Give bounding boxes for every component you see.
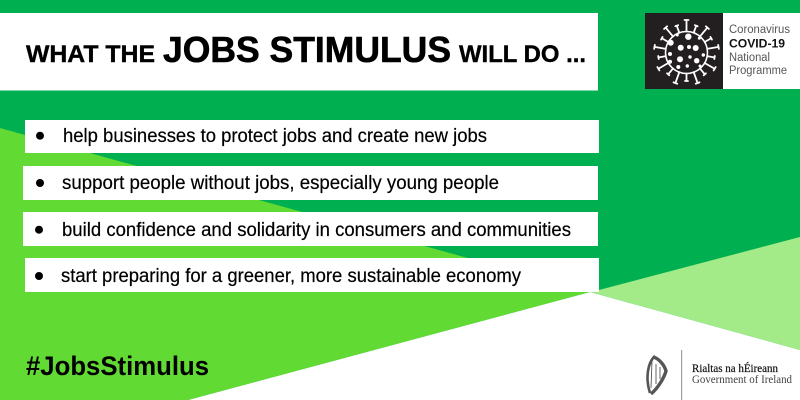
background: light green wedge left <box>0 128 590 400</box>
bullet panel 2 <box>23 166 598 200</box>
title banner: JOBS STIMULUS <box>163 29 451 70</box>
logo: COVID-19 National Programme: COVID-19 <box>729 38 785 50</box>
bullet panel 1 <box>25 120 599 153</box>
bullet panel 2: support people without jobs, especially young people <box>62 173 499 194</box>
bullet panel 4: start preparing for a greener, more sustainable economy <box>61 266 521 287</box>
title banner: WHAT THE <box>26 41 155 68</box>
logo: Government of Ireland: Government of Ireland <box>692 374 792 386</box>
logo: COVID-19 National Programme: Coronavirus <box>729 24 790 36</box>
logo: COVID-19 National Programme: Programme <box>729 65 787 77</box>
icon: harp <box>648 356 666 394</box>
title banner <box>0 13 598 90</box>
logo: Government of Ireland: Rialtas na hÉireann <box>692 361 778 375</box>
background: white wedge <box>188 292 800 400</box>
logo: Government of Ireland <box>648 350 792 400</box>
hashtag: #JobsStimulus <box>26 351 209 381</box>
bullet panel 4 <box>25 258 599 292</box>
bullet panel 1: help businesses to protect jobs and create new jobs <box>63 126 487 147</box>
bullet panel 3: build confidence and solidarity in consumers and communities <box>62 220 571 241</box>
icon: coronavirus <box>654 20 719 84</box>
bullet panel 3 <box>23 212 598 246</box>
logo: COVID-19 National Programme: National <box>729 52 770 64</box>
title banner: WILL DO ... <box>459 41 586 68</box>
logo: COVID-19 National Programme <box>645 13 800 89</box>
background: pale green wedge right <box>590 237 800 350</box>
